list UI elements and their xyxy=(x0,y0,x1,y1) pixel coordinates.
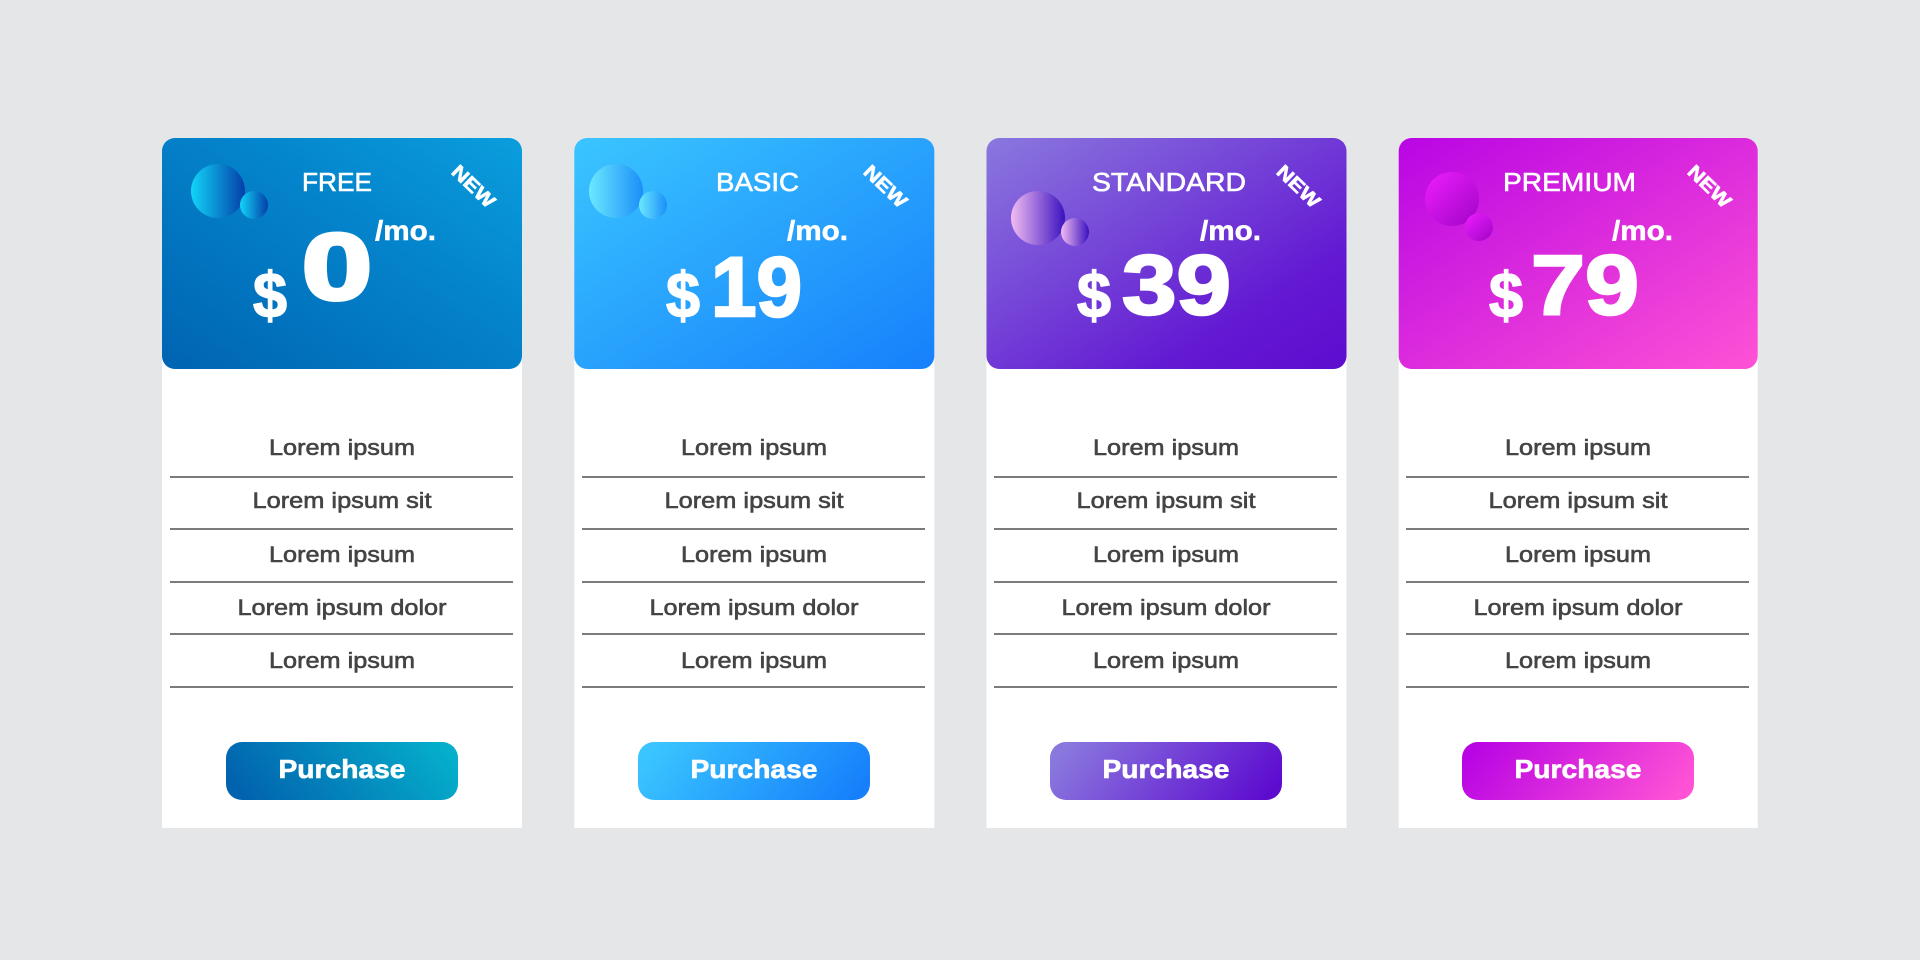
button: purchase: Purchase xyxy=(1514,754,1642,784)
feature 5: Lorem ipsum xyxy=(1093,648,1239,673)
feature 3: Lorem ipsum xyxy=(1505,542,1651,567)
plan name: BASIC xyxy=(716,169,799,197)
card body xyxy=(574,300,934,828)
feature 1: Lorem ipsum xyxy=(269,435,415,460)
price: 79 xyxy=(1531,238,1639,332)
header: free xyxy=(162,138,522,369)
feature 2: Lorem ipsum sit xyxy=(1076,488,1256,513)
feature 4: Lorem ipsum dolor xyxy=(650,595,858,620)
feature 3: Lorem ipsum xyxy=(1093,542,1239,567)
price: 39 xyxy=(1122,238,1231,332)
feature 4: Lorem ipsum dolor xyxy=(1474,595,1682,620)
panel: standard plan xyxy=(986,138,1346,828)
feature 3: Lorem ipsum xyxy=(269,542,415,567)
feature 2: Lorem ipsum sit xyxy=(664,488,844,513)
header: standard xyxy=(986,138,1346,369)
per month: /mo. xyxy=(1612,215,1673,246)
feature 2: Lorem ipsum sit xyxy=(1488,488,1668,513)
currency sign: $ xyxy=(1489,259,1523,331)
icon: bubbles xyxy=(1011,191,1089,246)
button: purchase xyxy=(638,742,870,800)
icon: bubbles xyxy=(1425,172,1493,241)
button: purchase: Purchase xyxy=(278,754,406,784)
panel: basic plan xyxy=(574,138,934,828)
feature 4: Lorem ipsum dolor xyxy=(238,595,446,620)
feature 1: Lorem ipsum xyxy=(681,435,827,460)
icon: bubbles xyxy=(589,164,667,219)
card body xyxy=(1399,300,1758,828)
per month: /mo. xyxy=(375,215,436,246)
feature list xyxy=(1406,435,1749,687)
button: purchase xyxy=(1462,742,1694,800)
per month: /mo. xyxy=(787,215,848,246)
feature 1: Lorem ipsum xyxy=(1093,435,1239,460)
badge: new: NEW xyxy=(859,161,911,213)
feature 4: Lorem ipsum dolor xyxy=(1062,595,1270,620)
feature 5: Lorem ipsum xyxy=(269,648,415,673)
feature list xyxy=(994,435,1337,687)
feature 5: Lorem ipsum xyxy=(1505,648,1651,673)
per month: /mo. xyxy=(1200,215,1261,246)
feature 5: Lorem ipsum xyxy=(681,648,827,673)
price: 0 xyxy=(302,214,372,319)
feature list xyxy=(582,435,925,687)
button: purchase xyxy=(1050,742,1282,800)
header: basic xyxy=(574,138,934,369)
currency sign: $ xyxy=(253,259,287,331)
panel: premium plan xyxy=(1399,138,1758,828)
plan name: STANDARD xyxy=(1092,169,1246,197)
feature 2: Lorem ipsum sit xyxy=(252,488,432,513)
plan name: PREMIUM xyxy=(1503,169,1636,197)
card body xyxy=(162,300,522,828)
card body xyxy=(986,300,1346,828)
badge: new: NEW xyxy=(1683,161,1735,213)
badge: new: NEW xyxy=(1272,161,1324,213)
panel: free plan xyxy=(162,138,522,828)
button: purchase: Purchase xyxy=(1102,754,1230,784)
icon: bubbles xyxy=(191,164,268,219)
price: 19 xyxy=(711,240,802,334)
button: purchase xyxy=(226,742,458,800)
feature 1: Lorem ipsum xyxy=(1505,435,1651,460)
button: purchase: Purchase xyxy=(690,754,818,784)
plan name: FREE xyxy=(302,169,372,197)
header: premium xyxy=(1399,138,1758,369)
currency sign: $ xyxy=(1077,259,1111,331)
feature 3: Lorem ipsum xyxy=(681,542,827,567)
badge: new: NEW xyxy=(447,161,499,213)
currency sign: $ xyxy=(666,259,700,331)
feature list xyxy=(170,435,513,687)
